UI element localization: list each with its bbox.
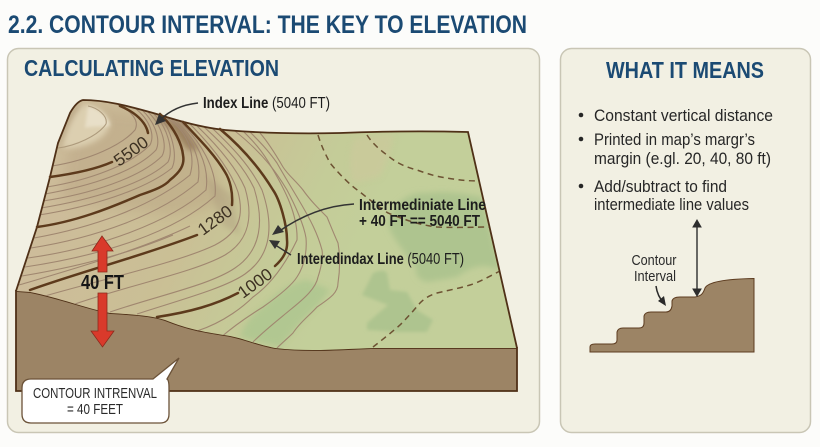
label: intermediate line [272, 197, 486, 235]
label: 40 ft: 40 FT [81, 272, 124, 294]
terrain block diagram [0, 90, 530, 423]
stepped terrain profile [590, 278, 754, 352]
label: interedindax line: Interedindax Line (5040 FT) [297, 251, 464, 268]
bullet list: Printed in map’s margr’s [594, 130, 755, 149]
bullet list: Add/subtract to find [594, 177, 727, 196]
contour labels [110, 133, 276, 302]
callout: contour interval: CONTOUR INTRENVAL [33, 385, 157, 402]
contour labels: 1280 [194, 202, 236, 239]
label: contour interval: Contour [632, 252, 676, 269]
heading: calculating elevation: CALCULATING ELEVATION [24, 55, 279, 81]
bullet list: Constant vertical distance [594, 106, 773, 125]
title: 2.2. CONTOUR INTERVAL: THE KEY TO ELEVATION [8, 11, 527, 39]
contour labels: 1000 [234, 265, 276, 302]
label: interedindax line [269, 240, 464, 268]
callout: contour interval [22, 358, 179, 423]
panel: what it means [560, 48, 810, 432]
land outline [16, 100, 517, 348]
arrow: contour interval pointer [656, 286, 666, 306]
panel: calculating elevation [0, 48, 540, 432]
label: intermediate line: Intermediniate Line [359, 197, 486, 214]
front soil face [16, 291, 517, 391]
bullet list: margin (e.gl. 20, 40, 80 ft) [594, 149, 771, 168]
bullet list [579, 106, 773, 214]
bullet list: intermediate line values [594, 195, 749, 214]
index contour lines [30, 106, 287, 317]
callout: contour interval: = 40 FEET [67, 401, 123, 418]
thin contour lines [19, 105, 340, 348]
contour labels: 5500 [110, 133, 152, 170]
land surface [16, 101, 516, 350]
red double arrow: 40 ft [91, 236, 114, 347]
label: contour interval: Interval [634, 268, 676, 285]
label: intermediate line: + 40 FT == 5040 FT [359, 213, 480, 230]
vertical double arrow [693, 220, 701, 296]
dashed contour lines [318, 135, 500, 347]
heading: what it means: WHAT IT MEANS [606, 57, 764, 83]
label: index line [155, 95, 330, 125]
label: contour interval [632, 252, 676, 285]
label: index line: Index Line (5040 FT) [203, 95, 330, 112]
